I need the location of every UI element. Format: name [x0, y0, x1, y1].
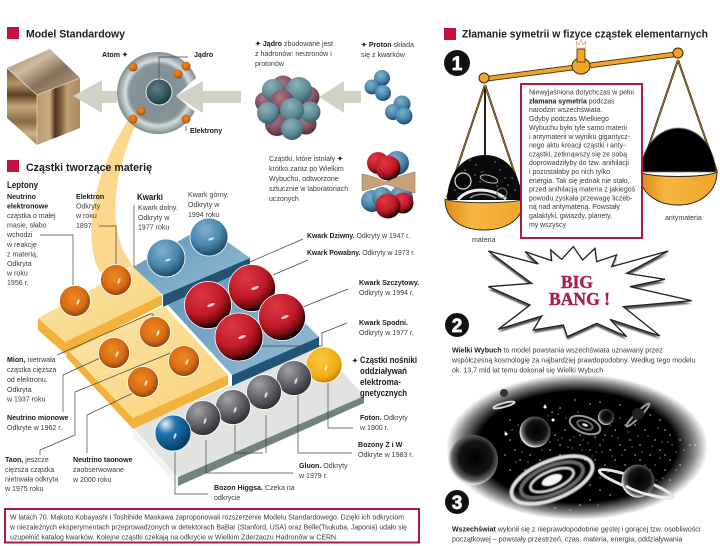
- text: Elektron: Elektron: [76, 194, 104, 201]
- text: Kwark dolny: [138, 205, 178, 232]
- diagram: proton quarks: [364, 70, 412, 124]
- platform: lower yellow leptons: [66, 306, 228, 429]
- label: Atom: Atom ✦: [102, 51, 128, 59]
- text: Neutrino elektronowe: cząstka o małej: [7, 213, 56, 220]
- big galaxy: [505, 446, 599, 514]
- text: Jądro description: [255, 40, 333, 68]
- text: Wszechświat: początkowej – powstały przestrzeń, czas, materia, energia, oddziaływania: [452, 536, 682, 544]
- text: Kwark Spodni: [359, 320, 414, 337]
- text box: broken symmetry: doprowadziłyby do tzw. anihilacji: [529, 160, 629, 167]
- text: Neutrino elektronowe: elektronowe: [7, 204, 48, 210]
- text: Kwark Szczytowy: Odkryty w 1994 r.: [359, 290, 414, 297]
- diagram: nucleus cluster: [255, 76, 320, 140]
- text: Neutrino elektronowe: masie, słabo: [7, 222, 47, 230]
- label: Elektrony: Elektrony: [190, 128, 222, 135]
- text: Bozony Z i W: Bozony Z i W: [358, 442, 403, 449]
- text: Cząstki nośniki: gnetycznych: [360, 388, 407, 398]
- text: Kwark Spodni: Kwark Spodni.: [359, 320, 408, 327]
- leader lines: [40, 205, 353, 494]
- spheres: leptons: [60, 264, 200, 398]
- number badge 3: [445, 490, 469, 514]
- spheres: blue quarks: [147, 218, 228, 277]
- callout: Kobayashi and Maskawa: W latach 70. Makoto Kobayashi i Toshihide Maskawa zaproponowali rozszerzenie Modelu Standardowego. Dzięki ich odkryciom: [10, 514, 404, 522]
- section marker: Cząstki tworzące materię: [7, 160, 19, 172]
- text: Proton description: się z kwarków: [361, 52, 406, 59]
- text: Taon: cięższa cząstka: [5, 467, 54, 474]
- text: Elektron: w roku: [75, 213, 97, 220]
- section marker: Model Standardowy: [7, 27, 19, 39]
- text: Neutrino taonowe: Neutrino taonowe: [73, 457, 133, 464]
- text box: broken symmetry: nego aktu kreacji cząstki i anty-: [529, 142, 625, 150]
- text: early particles description: krótko zaraz po Wielkim: [269, 166, 344, 173]
- text: Cząstki nośniki: ✦: [352, 357, 358, 365]
- text: Kwark Szczytowy: [359, 280, 419, 297]
- illustration: Big Bang starburst: BIG: [561, 272, 593, 292]
- number badge 2: 2: [452, 316, 462, 337]
- illustration: universe: [446, 374, 708, 520]
- stars: [505, 400, 695, 508]
- text box: broken symmetry: złamana symetria podczas: [529, 98, 615, 106]
- text: Jądro description: protonów: [255, 61, 285, 68]
- text: Foton: [359, 415, 408, 432]
- text box: broken symmetry: cząstki, zetknąwszy się ze sobą: [529, 152, 627, 158]
- text: Taon: nietrwała odkryta: [5, 476, 58, 484]
- text: Bozon Higgsa: odkrycie: [214, 495, 240, 502]
- text: Neutrino mionowe: Odkryte w 1962 r.: [7, 425, 62, 432]
- text: Kwarki heading: Kwarki: [137, 192, 163, 202]
- text: Cząstki nośniki: Cząstki nośniki: [360, 355, 417, 365]
- label: antymateria: antymateria: [665, 215, 702, 222]
- text box: broken symmetry: Niewyjaśniona dotychczas w pełni: [529, 90, 634, 96]
- number badge 1: [444, 50, 470, 76]
- text: Neutrino elektronowe: 1956 r.: [7, 280, 29, 287]
- text: Bozon Higgsa: [214, 485, 295, 502]
- text: Neutrino mionowe: Neutrino mionowe: [7, 415, 69, 422]
- text: Kwark dolny: 1977 roku: [138, 224, 169, 232]
- number badge 3: 3: [452, 493, 462, 514]
- sphere highlights: [76, 237, 328, 439]
- text: Kwark górny: Odkryty w: [188, 202, 220, 209]
- text: Gluon: [298, 463, 348, 480]
- text: early particles description: [269, 155, 348, 203]
- heading: Złamanie symetrii: Złamanie symetrii w fizyce cząstek elementarnych: [462, 28, 708, 40]
- text: Neutrino mionowe: [7, 415, 69, 432]
- text: Proton description: ✦ Proton składa: [361, 41, 414, 49]
- text box: broken symmetry: przed anihilacją materia z jakiegoś: [529, 186, 636, 194]
- text: Neutrino elektronowe: w roku: [6, 270, 28, 278]
- heading: Cząstki tworzące materię: Cząstki tworzące materię: [26, 162, 152, 174]
- platform: lower blue quarks: [168, 268, 319, 386]
- right pan: antimatter: [639, 128, 717, 205]
- text: Cząstki nośniki: [352, 355, 417, 398]
- text: Cząstki nośniki: oddziaływań: [360, 366, 407, 376]
- diagram: quark-gluon cluster: [361, 151, 415, 218]
- text: Elektron: 1897: [76, 223, 92, 230]
- text: Bozony Z i W: [358, 442, 413, 459]
- text: Neutrino taonowe: w 2000 roku: [72, 477, 111, 484]
- text: Wielki Wybuch: ok. 13,7 mld lat temu dokonał się Wielki Wybuch: [452, 368, 603, 374]
- callout: Kobayashi and Maskawa: w niezależnych eksperymentach przeprowadzonych w detektorach BaBar (Stanford, USA) oraz Belle(Tsukuba, Japonia) udało się: [9, 524, 407, 532]
- platform: upper yellow leptons: [38, 267, 162, 354]
- text: Neutrino taonowe: [72, 457, 133, 484]
- text: Gluon: Gluon. Odkryty: [299, 463, 348, 470]
- text: Kwark Spodni: Odkryty w 1977 r.: [359, 330, 414, 337]
- number badge 2: [445, 313, 469, 337]
- illustration: Big Bang starburst: [488, 247, 692, 340]
- text: Kwark górny: [188, 192, 229, 219]
- small galaxy: [567, 412, 603, 438]
- heading: Model Standardowy: Model Standardowy: [26, 28, 125, 40]
- spheres: red quarks: [184, 264, 306, 361]
- text: Taon: Taon, jeszcze: [5, 457, 49, 464]
- text: Mion: Odkryta: [7, 387, 32, 394]
- platform: gray force carriers: [133, 342, 364, 486]
- illustration: Big Bang starburst: BANG !: [549, 289, 610, 309]
- text: Kwark Dziwny: Kwark Dziwny. Odkryty w 1947 r.: [307, 233, 410, 240]
- text: Mion: w 1937 roku: [6, 396, 45, 404]
- text box: broken symmetry: my wszyscy: [529, 222, 567, 229]
- text: Neutrino elektronowe: Odkryta: [7, 261, 32, 268]
- swoosh: electron to particles: [91, 120, 137, 272]
- text: Taon: w 1975 roku: [4, 486, 43, 493]
- text box: broken symmetry: i antymaterii w wyniku gigantycz-: [529, 134, 630, 141]
- text: Kwark dolny: Kwark dolny.: [138, 205, 178, 212]
- illustration: scales: [445, 40, 717, 230]
- text: Bozony Z i W: Odkryte w 1983 r.: [358, 452, 413, 459]
- text box: broken symmetry: Gdyby podczas Wielkiego: [529, 116, 609, 123]
- diagram: atom: [117, 52, 215, 134]
- text: Elektron: [75, 194, 104, 230]
- arrow: nucleus to atom: [176, 81, 241, 113]
- text box: broken symmetry: [521, 84, 642, 238]
- text: Gluon: w 1979 r.: [298, 473, 328, 480]
- arrow: proton to nucleus: [319, 81, 361, 113]
- text box: broken symmetry: narodzin wszechświata.: [529, 107, 602, 114]
- text: Neutrino elektronowe: [6, 194, 56, 287]
- text: Jądro description: z hadronów: neutronów i: [255, 51, 332, 58]
- text box: broken symmetry: galaktyki, gwiazdy, planety,: [529, 213, 612, 220]
- text: Neutrino elektronowe: Neutrino: [7, 194, 37, 201]
- callout: Kobayashi and Maskawa: uzupełnić katalog kwarków. Kolejne cząstki czekają na odkrycie w Wielkim Zderzaczu Hadronów w CERN.: [10, 534, 338, 542]
- text: Bozon Higgsa: Bozon Higgsa. Czeka na: [214, 485, 295, 492]
- text: Proton description: [361, 41, 414, 59]
- text: Kwark górny: 1994 roku: [188, 212, 219, 219]
- arrow: atom to cube: [73, 80, 117, 113]
- text box: broken symmetry: Wybuchu było tyle samo materii: [529, 125, 627, 132]
- text box: broken symmetry: i pozostałaby po nich tylko: [529, 169, 610, 176]
- text: Wszechświat: Wszechświat wyłonił się z nieprawdopodobnie gęstej i gorącej tzw. osobliwości: [452, 526, 701, 534]
- text: Leptony heading: Leptony: [7, 180, 38, 190]
- text: early particles description: Cząstki, które istniały ✦: [269, 155, 343, 163]
- text box: broken symmetry: ną nad antymaterią. Powstały: [529, 204, 621, 211]
- text: Wielki Wybuch: Wielki Wybuch to model powstania wszechświata uznawany przez: [452, 348, 663, 354]
- text: Kwark Szczytowy: Kwark Szczytowy.: [359, 280, 419, 287]
- text: Neutrino elektronowe: wchodzi: [6, 232, 33, 239]
- text: Cząstki nośniki: elektroma-: [360, 377, 401, 387]
- text: Foton: Foton. Odkryty: [360, 415, 408, 422]
- icon: wooden cube: [7, 49, 80, 145]
- text: Elektron: Odkryty: [76, 204, 101, 210]
- planets: [448, 435, 498, 485]
- text box: broken symmetry: energia. Tak się jednak nie stało,: [529, 178, 630, 185]
- text: Wielki Wybuch: [451, 348, 695, 374]
- text: Mion: [6, 357, 56, 404]
- text: Mion: Mion, nietrwała: [7, 357, 56, 364]
- label: Jądro: Jądro: [194, 52, 214, 59]
- text: Neutrino elektronowe: z materią,: [7, 252, 38, 258]
- number badge 1: 1: [452, 54, 463, 75]
- text: Wszechświat: [452, 526, 701, 544]
- text: Neutrino elektronowe: w reakcję: [6, 242, 37, 249]
- text: Kwark Powabny: Kwark Powabny. Odkryty w 1973 r.: [307, 250, 415, 257]
- text: early particles description: Wybuchu, odtworzone: [269, 176, 339, 183]
- text: Kwark górny: Kwark górny.: [188, 192, 229, 199]
- label: materia: materia: [472, 237, 496, 244]
- platform: upper blue quarks: [133, 226, 250, 307]
- section marker: Złamanie symetrii: [444, 28, 456, 40]
- text: Mion: cząstka cięższa: [7, 367, 56, 374]
- left pan: matter: [445, 155, 524, 230]
- text: Neutrino taonowe: zaobserwowane: [73, 467, 124, 474]
- text: early particles description: sztucznie w laboratoriach: [269, 186, 348, 193]
- callout: Kobayashi and Maskawa: [5, 509, 419, 542]
- text: Kwark dolny: Odkryty w: [138, 215, 170, 222]
- text: Foton: w 1900 r.: [359, 425, 389, 432]
- text: Mion: od elektronu.: [7, 377, 48, 384]
- text: Wielki Wybuch: współczesną kosmologię za najbardziej prawdopodobny. Według tego modelu: [451, 358, 695, 364]
- text: early particles description: uczonych: [269, 196, 299, 203]
- text: Taon: [4, 457, 58, 493]
- spheres: force carriers: [155, 347, 342, 451]
- text box: broken symmetry: powodu zyskała przewagę liczeb-: [529, 196, 632, 202]
- text: Jądro description: ✦ Jądro zbudowane jest: [255, 40, 333, 48]
